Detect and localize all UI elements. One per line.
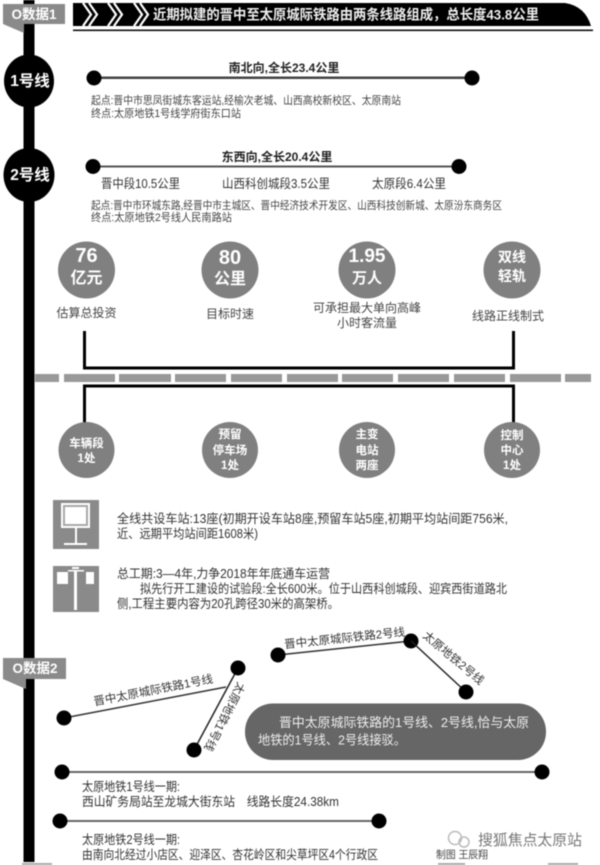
facility: parking yard: 预留 [218, 427, 242, 441]
metro line 2 phase: 由南向北经过小店区、迎泽区、杏花岭区和尖草坪区4个行政区 [82, 847, 378, 862]
line 2 route: 晋中段10.5公里 [101, 176, 180, 191]
header banner [73, 3, 593, 31]
callout pill: 地铁的1号线、2号线接驳。 [258, 732, 406, 748]
tag: data 2: O数据2 [12, 660, 58, 676]
schedule text: 总工期:3—4年,力争2018年年底通车运营 [117, 566, 330, 581]
stat: investment: 估算总投资 [56, 305, 117, 320]
facility: control centre: 控制 [500, 428, 524, 442]
stat: track type: 轻轨 [498, 268, 526, 284]
facility: substations: 主变 [356, 427, 379, 441]
map: intercity line 2: 晋中太原城际铁路2号线 [283, 625, 406, 651]
line 1 route [86, 60, 480, 86]
metro line 1 phase: 太原地铁1号线一期: [82, 779, 180, 794]
tag: data 1 [3, 4, 65, 33]
stat: investment: 76 [75, 245, 98, 267]
upper bracket [84, 331, 514, 368]
stat: passenger flow: 可承担最大单向高峰 [313, 300, 421, 315]
badge: line 2 [4, 148, 54, 202]
badge: line 2: 2号线 [10, 165, 50, 184]
map: intercity line 1 [56, 672, 226, 726]
facility: parking yard: 停车场 [213, 443, 248, 457]
line 2 route: 山西科创城段3.5公里 [222, 176, 330, 191]
header banner: 近期拟建的晋中至太原城际铁路由两条线路组成，总长度43.8公里 [153, 6, 539, 22]
stations text: 近、远期平均站间距1608米) [117, 527, 258, 541]
map: metro line 1 [186, 660, 248, 758]
map: intercity line 2 [270, 625, 418, 662]
callout pill: 晋中太原城际铁路的1号线、2号线,恰与太原 [279, 715, 529, 730]
icon: station sign [53, 500, 99, 549]
stat: passenger flow [313, 242, 421, 330]
stat: passenger flow: 小时客流量 [337, 315, 397, 330]
stat: speed [202, 242, 258, 321]
icon: chevrons [83, 3, 148, 26]
stat: track type [472, 242, 544, 323]
facility: depot: 1处 [78, 451, 96, 465]
tag: data 1: O数据1 [11, 6, 57, 22]
icon: viaduct [53, 566, 99, 612]
facility: parking yard [202, 422, 258, 478]
timeline spine [24, 0, 34, 862]
map: intercity line 1: 晋中太原城际铁路1号线 [92, 672, 215, 709]
line 1 description [91, 93, 401, 120]
facility: substations: 电站 [356, 443, 379, 457]
callout pill [245, 704, 546, 760]
line 2 route: 东西向,全长20.4公里 [222, 149, 332, 164]
map: metro line 2: 太原地铁2号线 [420, 628, 487, 688]
stat: speed: 80 [219, 247, 241, 269]
stat: passenger flow: 万人 [352, 270, 382, 287]
line 1 description: 起点:晋中市思凤街城东客运站,经榆次老城、山西高校新校区、太原南站 [91, 93, 401, 107]
facility: control centre [484, 422, 540, 478]
metro line 1 phase [54, 764, 550, 809]
facility: control centre: 中心 [500, 443, 524, 457]
badge: line 1 [4, 54, 54, 108]
metro line 2 phase: 太原地铁2号线一期: [82, 832, 180, 847]
line 1 route: 南北向,全长23.4公里 [229, 60, 339, 75]
metro line 1 phase: 西山矿务局站至龙城大街东站 线路长度24.38km [82, 794, 339, 809]
stat: speed: 目标时速 [206, 307, 254, 321]
stations text: 全线共设车站:13座(初期开设车站8座,预留车站5座,初期平均站间距756米, [117, 511, 508, 526]
facility: depot: 车辆段 [69, 436, 104, 450]
metro line 2 phase [52, 814, 386, 862]
schedule text [117, 566, 507, 611]
schedule text: 侧,工程主要内容为20孔跨径30米的高架桥。 [117, 596, 339, 611]
line 1 description: 终点:太原地铁1号线学府街东口站 [91, 106, 241, 120]
facility: control centre: 1处 [503, 458, 521, 472]
map: metro line 2 [411, 628, 487, 700]
line 2 route: 太原段6.4公里 [372, 176, 446, 191]
facility: depot [58, 422, 114, 478]
line 2 description: 终点:太原地铁2号线人民南路站 [91, 210, 232, 224]
facility: parking yard: 1处 [221, 458, 239, 472]
line 2 route [86, 149, 466, 191]
track band [35, 374, 591, 382]
tag: data 2 [3, 658, 66, 689]
badge: line 1: 1号线 [10, 71, 50, 90]
stat: track type: 线路正线制式 [472, 308, 544, 323]
map: metro line 1: 太原地铁1号线 [201, 680, 248, 754]
watermark: 搜狐焦点太原站 [478, 832, 582, 849]
stations text [117, 511, 508, 541]
stat: passenger flow: 1.95 [349, 246, 386, 267]
stat: speed: 公里 [214, 271, 246, 288]
stat: investment [56, 242, 117, 320]
line 2 description [91, 198, 502, 224]
stat: track type: 双线 [498, 249, 526, 265]
stat: investment: 亿元 [70, 269, 103, 287]
lower bracket [84, 386, 514, 424]
line 2 description: 起点:晋中市环城东路,经晋中市主城区、晋中经济技术开发区、山西科技创新城、太原汾东商务区 [91, 198, 502, 212]
schedule text: 拟先行开工建设的试验段:全长600米。位于山西科创城段、迎宾西街道路北 [140, 581, 507, 596]
facility: substations: 两座 [356, 458, 379, 472]
facility: substations [339, 422, 395, 478]
credit: 制图 王辰翔 [436, 848, 488, 861]
